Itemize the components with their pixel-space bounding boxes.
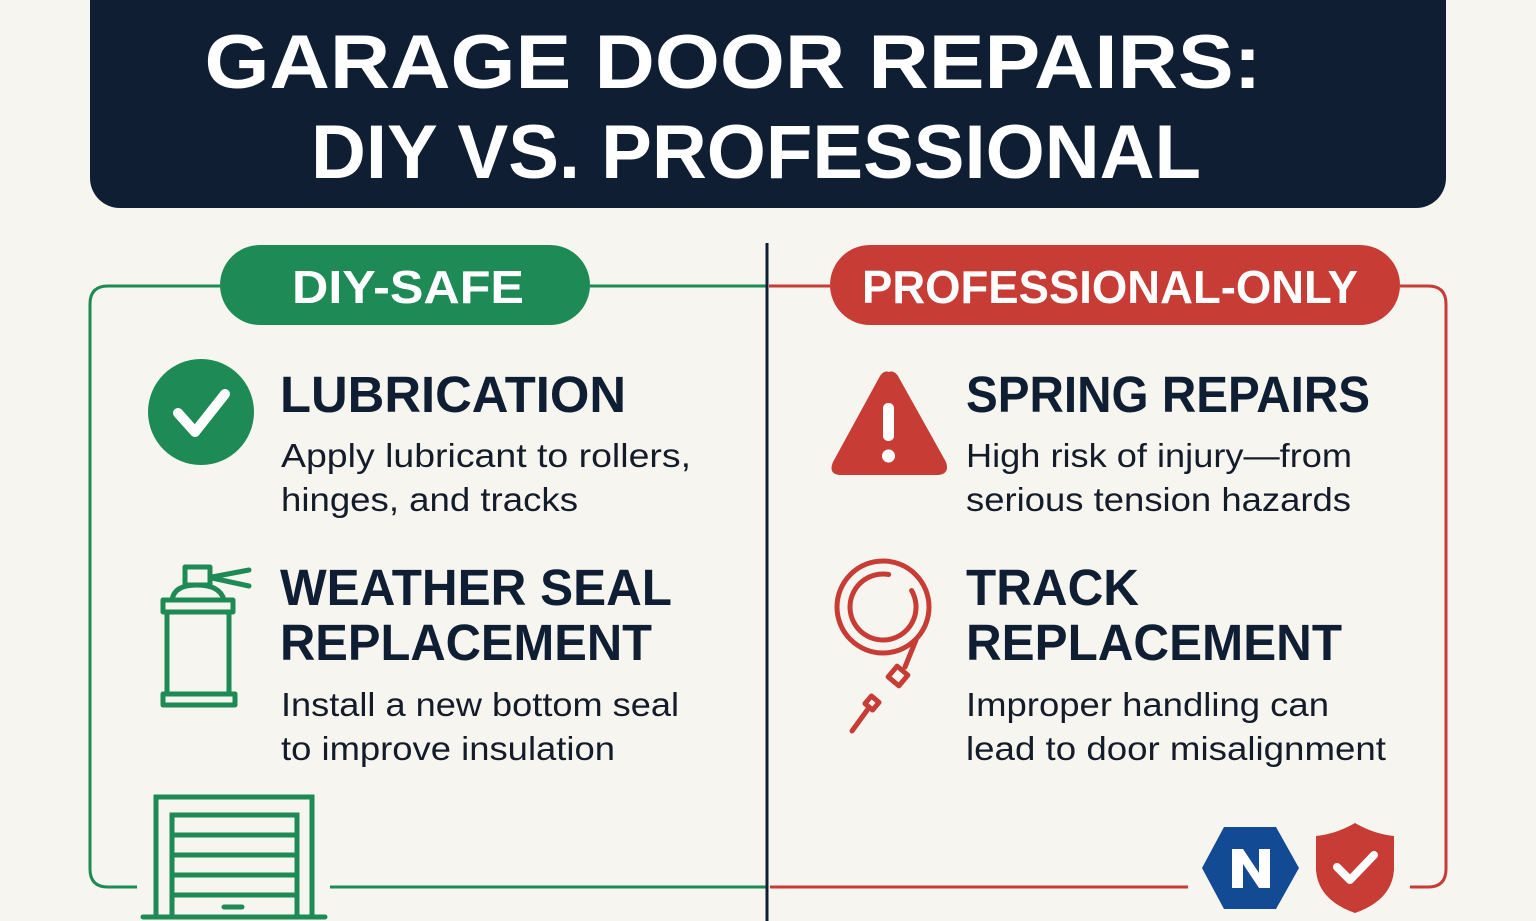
icon: garage door (143, 797, 325, 917)
item: weather seal: WEATHER SEAL (280, 559, 672, 616)
item: track replacement: Improper handling can (966, 686, 1329, 723)
divider (766, 243, 768, 921)
icon: shield check (1316, 823, 1394, 913)
item: lubrication (280, 366, 691, 518)
item: spring repairs: serious tension hazards (966, 481, 1351, 518)
item: track replacement (966, 559, 1386, 767)
pill: DIY-SAFE: DIY-SAFE (292, 261, 524, 313)
title banner (90, 0, 1446, 208)
pill: PROFESSIONAL-ONLY (830, 245, 1400, 325)
item: spring repairs (966, 366, 1370, 518)
pill: PROFESSIONAL-ONLY: PROFESSIONAL-ONLY (862, 261, 1358, 313)
item: lubrication: hinges, and tracks (281, 481, 578, 518)
item: weather seal: to improve insulation (281, 730, 615, 767)
icon: N hexagon badge (1202, 827, 1299, 909)
item: weather seal: REPLACEMENT (280, 614, 652, 671)
icon: check circle (148, 359, 254, 465)
item: weather seal (280, 559, 679, 767)
item: track replacement: REPLACEMENT (966, 614, 1342, 671)
item: spring repairs: High risk of injury—from (966, 437, 1352, 474)
pill: DIY-SAFE (220, 245, 590, 325)
title banner: GARAGE DOOR REPAIRS: (204, 20, 1262, 105)
panel: DIY-safe (90, 245, 767, 917)
item: track replacement: TRACK (966, 559, 1139, 616)
icon: spring cable (837, 561, 929, 731)
item: weather seal: Install a new bottom seal (281, 686, 679, 723)
item: lubrication: LUBRICATION (280, 366, 626, 423)
item: lubrication: Apply lubricant to rollers, (281, 437, 691, 474)
icon: warning triangle (832, 372, 947, 475)
icon: spray can (163, 567, 249, 705)
item: spring repairs: SPRING REPAIRS (966, 366, 1370, 423)
panel: professional-only (769, 245, 1446, 913)
title banner: DIY VS. PROFESSIONAL (311, 110, 1201, 195)
item: track replacement: lead to door misalignment (966, 730, 1386, 767)
